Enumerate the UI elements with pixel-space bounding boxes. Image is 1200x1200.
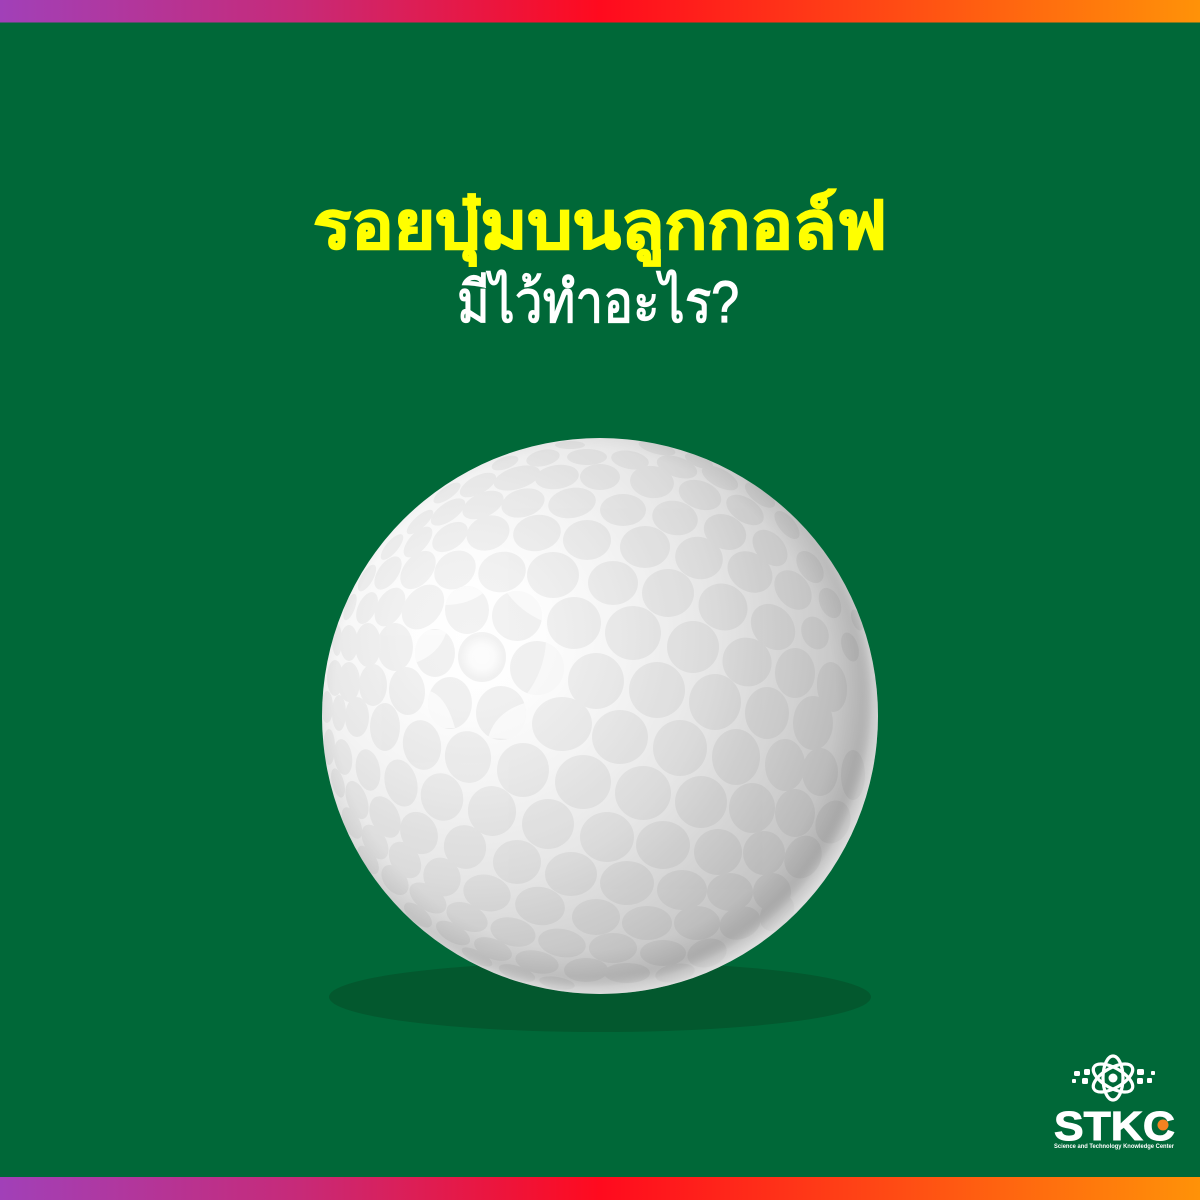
dimples (321, 437, 865, 992)
ball rim light (322, 438, 878, 994)
top gradient bar (0, 0, 1200, 22)
logo orange dot (1158, 1120, 1168, 1130)
title (313, 188, 887, 335)
specular highlights (412, 580, 570, 740)
ball shadow (329, 962, 871, 1032)
bottom gradient bar (0, 1177, 1200, 1200)
golf ball (321, 437, 878, 994)
logo wordmark: STKC (1054, 1103, 1175, 1149)
logo tagline: Science and Technology Knowledge Center (1054, 1144, 1175, 1150)
title line 2: white subheading: มีไว้ทำอะไร? (457, 269, 739, 335)
ball body (322, 438, 878, 994)
title line 1: yellow heading: รอยบุ๋มบนลูกกอล์ฟ (313, 188, 887, 267)
STKC logo (1054, 1056, 1175, 1150)
logo atom icon (1089, 1056, 1137, 1100)
logo dots (1072, 1069, 1155, 1084)
